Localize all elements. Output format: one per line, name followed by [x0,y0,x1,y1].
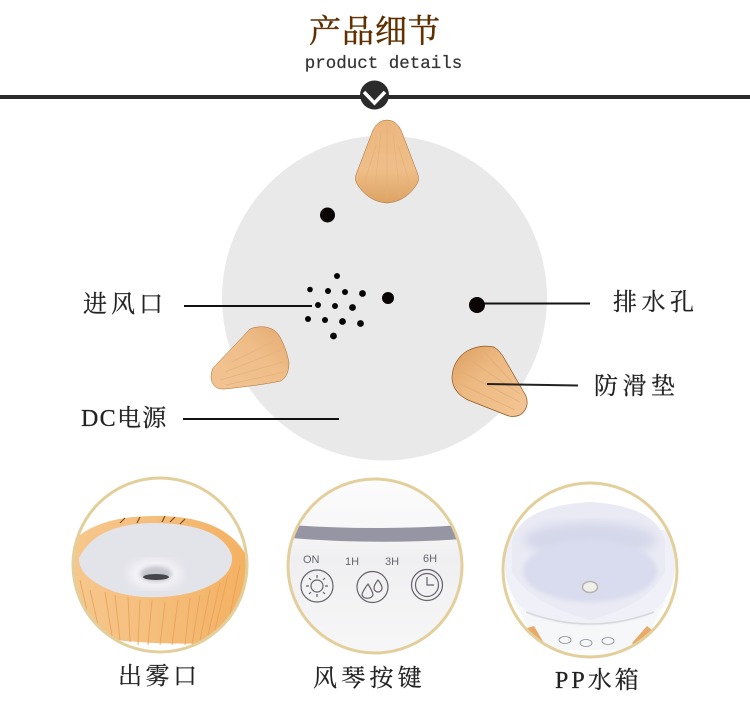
icon: sun button [301,570,333,602]
icon: clock button [412,570,442,600]
callout: 排水孔: 排水孔 [613,289,698,316]
screw holes [320,208,485,313]
panel: touch buttons [287,478,463,654]
callout: 进风口: 进风口 [83,291,167,318]
inner wall [525,521,655,550]
panel: touch buttons: ON [303,554,320,566]
panel: touch buttons: 3H [385,556,399,568]
panel: mist outlet [73,478,247,652]
bowl [524,554,656,602]
foot: left cone [211,327,289,389]
panel: device underside [211,120,547,460]
panel: touch buttons: 1H [345,556,359,568]
foot: right cone [452,346,527,416]
subtitle: product details [305,54,462,74]
panel: touch buttons: 6H [423,553,437,565]
wooden legs [527,626,543,642]
panel: PP water tank [503,483,677,657]
lower body [512,600,668,650]
callout: DC电源: DC电源 [81,405,168,432]
outer rim [505,530,675,600]
icon: water drops button [357,572,388,602]
label: PP水箱: PP水箱 [555,667,642,694]
label: 出雾口: 出雾口 [118,663,200,690]
title: 产品细节 [309,13,441,49]
lip [516,502,660,530]
base disc [222,136,547,460]
label: 风琴按键: 风琴按键 [313,665,426,692]
callout: 防滑垫: 防滑垫 [594,373,680,400]
foot: top cone [355,120,419,203]
air intake holes [305,273,366,339]
divider with chevron badge [0,80,750,110]
